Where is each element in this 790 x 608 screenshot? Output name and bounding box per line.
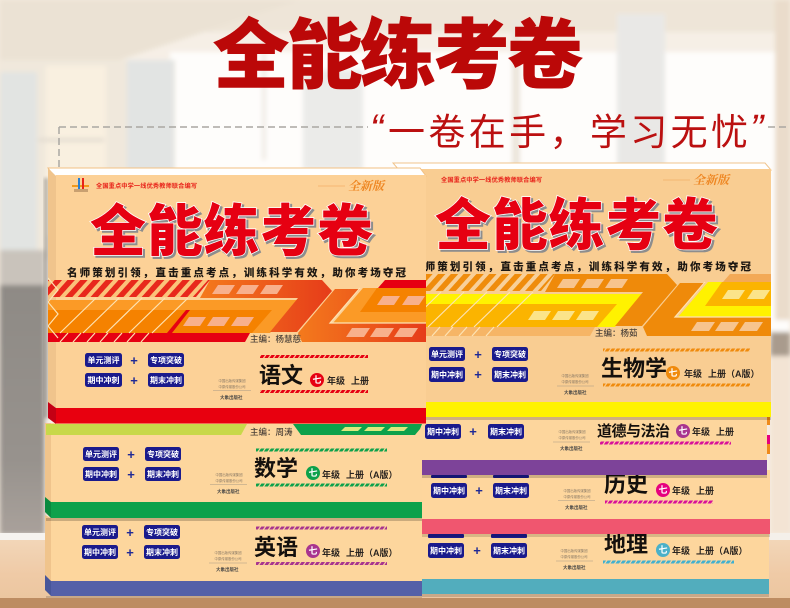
history publisher: 中原传媒股份公司: [563, 494, 591, 499]
book: geography: [422, 530, 769, 597]
Chinese banner: [48, 278, 426, 342]
Chinese subject: 七: [312, 375, 322, 385]
slogan: ”: [750, 107, 765, 151]
history buttons: 期末冲刺: [495, 486, 527, 496]
morality subject: 道德与法治: [597, 422, 670, 440]
math publisher: 大象出版社: [217, 488, 240, 495]
English buttons: [82, 525, 180, 560]
geography subject: 地理: [604, 532, 648, 557]
Chinese buttons: 期中冲刺: [88, 375, 120, 385]
math buttons: 期末冲刺: [147, 469, 179, 479]
history publisher: [558, 488, 595, 511]
English publisher: 大象出版社: [216, 566, 239, 573]
morality subject: 七: [678, 426, 688, 436]
biology publisher: [557, 373, 594, 396]
Chinese buttons: 单元测评: [88, 355, 120, 365]
biology header: 全国重点中学一线优秀教师联合编写: [441, 176, 542, 184]
math subject: 年级: [322, 469, 340, 480]
geography subject: [603, 532, 748, 564]
Chinese subject: 年级: [327, 375, 345, 386]
history subject: 年级: [672, 485, 690, 496]
math buttons: 单元测评: [85, 449, 117, 459]
math buttons: 期中冲刺: [85, 469, 117, 479]
book: mathematics: [45, 423, 422, 521]
biology subject: 年级: [684, 368, 702, 379]
Chinese header: [72, 178, 386, 193]
English subject: 年级: [322, 547, 340, 558]
geography buttons: [428, 534, 527, 558]
morality buttons: [425, 424, 524, 439]
math buttons: +: [127, 467, 135, 482]
book: Chinese (front left): [44, 168, 426, 424]
biology subject: [601, 348, 760, 386]
English subject: 上册（A版）: [346, 547, 398, 558]
English subject: 七: [308, 546, 318, 556]
morality subject: 上册: [716, 426, 734, 437]
geography subject: 年级: [672, 545, 690, 556]
history buttons: 期中冲刺: [433, 486, 465, 496]
history spine strip: [422, 519, 770, 534]
biology header: [441, 173, 731, 187]
English buttons: 期末冲刺: [146, 547, 178, 557]
English buttons: +: [126, 545, 134, 560]
math publisher: [210, 472, 247, 495]
Chinese cover title: 全能练考卷: [90, 200, 373, 263]
morality buttons: +: [469, 424, 477, 439]
morality publisher: 大象出版社: [560, 445, 583, 452]
math publisher: 中原传媒股份公司: [215, 478, 243, 483]
Chinese subject: 语文: [259, 363, 303, 388]
math subject: 数学: [254, 456, 298, 481]
English buttons: 专项突破: [146, 527, 178, 537]
geography subject: 七: [658, 545, 668, 555]
Chinese buttons: +: [130, 373, 138, 388]
math buttons: 专项突破: [147, 449, 179, 459]
logo: [72, 178, 89, 192]
math publisher: 中国出版传媒集团: [215, 472, 243, 477]
Chinese header: 全国重点中学一线优秀教师联合编写: [96, 182, 197, 190]
book: history: [422, 470, 770, 537]
biology slogan: 名师策划引领，直击重点考点，训练科学有效，助你考场夺冠: [412, 260, 752, 273]
history subject: 上册: [696, 485, 714, 496]
book: English: [45, 515, 422, 598]
history publisher: 大象出版社: [565, 504, 588, 511]
biology cover title: 全能练考卷: [435, 194, 718, 257]
slogan: 一卷在手，学习无忧: [388, 102, 748, 156]
math subject: 七: [308, 468, 318, 478]
biology subject: 生物学: [601, 356, 667, 381]
Chinese spine strip: [48, 402, 426, 424]
morality publisher: 中原传媒股份公司: [558, 435, 586, 440]
Chinese slogan: 名师策划引领，直击重点考点，训练科学有效，助你考场夺冠: [67, 266, 406, 279]
geography publisher: 中国出版传媒集团: [560, 548, 588, 553]
math buttons: [83, 447, 181, 482]
English subject: [254, 526, 398, 565]
geography publisher: 大象出版社: [563, 564, 586, 571]
history publisher: 中国出版传媒集团: [563, 488, 591, 493]
slogan: “: [370, 107, 386, 151]
history buttons: [431, 475, 529, 498]
biology buttons: 期中冲刺: [431, 370, 463, 380]
biology subject: 七: [668, 368, 678, 378]
Chinese publisher: 中原传媒股份公司: [218, 384, 246, 389]
biology buttons: +: [474, 347, 482, 362]
English publisher: 中原传媒股份公司: [214, 556, 242, 561]
book: morality and law: [422, 412, 770, 478]
morality subject: [597, 422, 734, 444]
English spine strip: [45, 575, 422, 598]
Chinese header: 全新版: [348, 179, 386, 193]
biology publisher: 中原传媒股份公司: [561, 379, 589, 384]
math banner remnant: [46, 424, 422, 435]
biology buttons: +: [474, 367, 482, 382]
biology editor: 主编：杨茹: [595, 328, 638, 338]
Chinese publisher: 大象出版社: [220, 394, 243, 401]
biology banner: [393, 274, 771, 336]
biology spine strip: [393, 402, 771, 417]
biology buttons: 期末冲刺: [494, 370, 526, 380]
geography buttons: 期中冲刺: [430, 546, 462, 556]
main title: 全能练考卷: [213, 14, 583, 99]
history subject: 七: [658, 485, 668, 495]
morality publisher: 中国出版传媒集团: [558, 429, 586, 434]
Chinese buttons: 期末冲刺: [150, 375, 182, 385]
math subject: [254, 448, 398, 486]
biology publisher: 中国出版传媒集团: [561, 373, 589, 378]
English publisher: [209, 550, 247, 573]
morality subject: 年级: [692, 426, 710, 437]
morality buttons: 期末冲刺: [490, 426, 522, 436]
biology buttons: 单元测评: [431, 349, 463, 359]
math subject: 上册（A版）: [346, 469, 398, 480]
Chinese publisher: 中国出版传媒集团: [218, 378, 246, 383]
morality spine strip: [422, 460, 767, 475]
Chinese buttons: [85, 353, 184, 388]
English buttons: 期中冲刺: [84, 547, 116, 557]
biology buttons: 专项突破: [494, 349, 526, 359]
geography publisher: 中原传媒股份公司: [560, 554, 588, 559]
math spine strip: [45, 497, 422, 521]
biology buttons: [429, 347, 528, 382]
Chinese subject: [259, 355, 369, 393]
Chinese publisher: [213, 378, 251, 401]
English publisher: 中国出版传媒集团: [214, 550, 242, 555]
biology subject: 上册（A版）: [708, 368, 760, 379]
geography subject: 上册（A版）: [696, 545, 748, 556]
Chinese buttons: 专项突破: [150, 355, 182, 365]
history buttons: +: [475, 483, 483, 498]
biology publisher: 大象出版社: [564, 389, 587, 396]
guide: dashed rule beside the slogan: [59, 127, 790, 168]
book: biology (front right): [393, 163, 771, 420]
history subject: [604, 472, 714, 504]
geography spine strip: [422, 579, 769, 594]
Chinese editor: 主编：杨慧慈: [250, 334, 302, 344]
English subject: 英语: [254, 535, 298, 560]
Chinese buttons: +: [130, 353, 138, 368]
math buttons: +: [127, 447, 135, 462]
biology header: 全新版: [693, 173, 731, 187]
math editor: 主编：周涛: [250, 427, 293, 437]
geography buttons: +: [473, 543, 481, 558]
geography buttons: 期末冲刺: [493, 546, 525, 556]
history subject: 历史: [604, 472, 648, 497]
morality buttons: 期中冲刺: [427, 426, 459, 436]
English buttons: +: [126, 525, 134, 540]
English buttons: 单元测评: [84, 527, 116, 537]
Chinese subject: 上册: [351, 375, 369, 386]
geography publisher: [556, 548, 593, 571]
morality publisher: [553, 429, 590, 452]
